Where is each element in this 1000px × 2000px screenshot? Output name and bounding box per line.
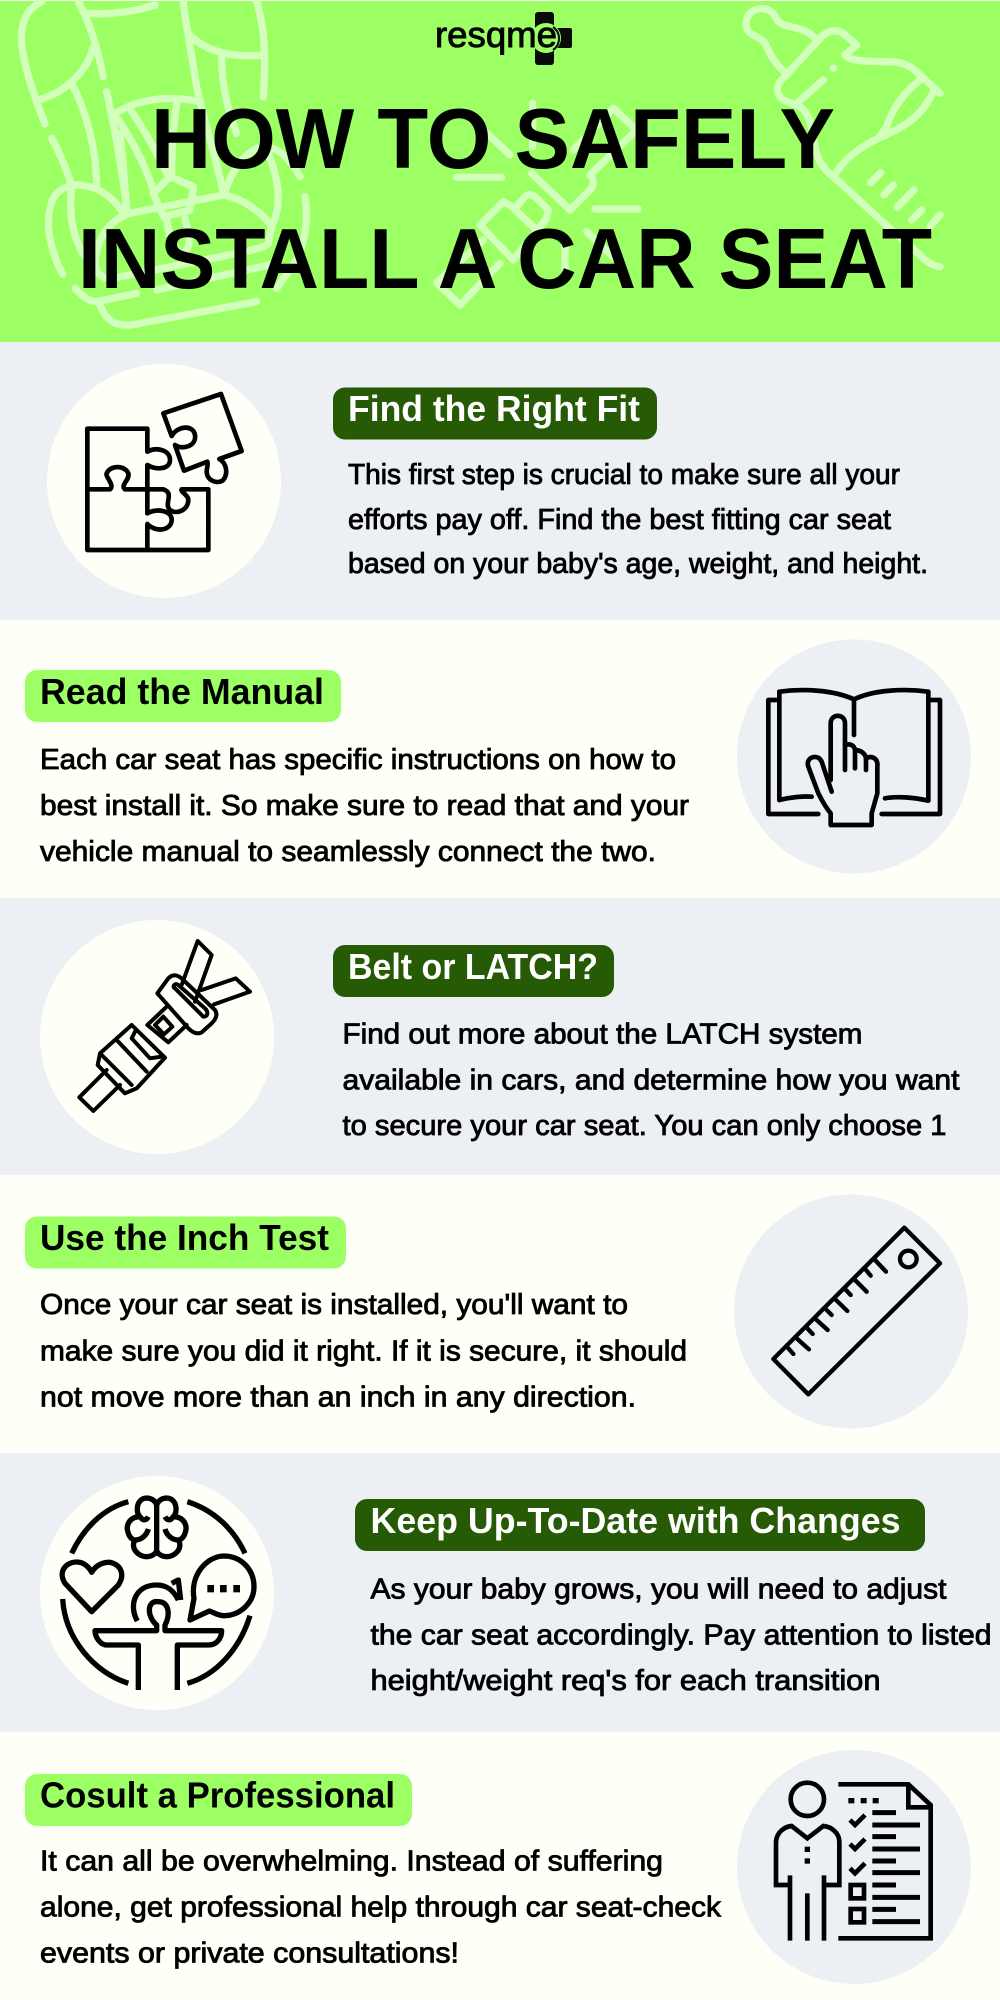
panel: consult a professional (0, 1732, 1000, 2000)
text: keep up-to-date with changes (370, 1574, 992, 1697)
heading: belt or latch: Belt or LATCH? (348, 946, 598, 987)
text: use the inch test: Once your car seat is installed, you'll want to (40, 1289, 628, 1321)
text: consult a professional: events or private consultations! (40, 1938, 459, 1970)
text: use the inch test: not move more than an inch in any direction. (40, 1382, 636, 1414)
header banner (0, 0, 1000, 342)
text: belt or latch (342, 1018, 960, 1142)
icon: person with brain, heart and speech bubble (40, 1476, 274, 1710)
panel: use the inch test (0, 1175, 1000, 1453)
title: INSTALL A CAR SEAT (78, 212, 932, 307)
text: belt or latch: to secure your car seat. You can only choose 1 (342, 1110, 946, 1142)
title: HOW TO SAFELY (151, 92, 835, 187)
panel: read the manual (0, 620, 1000, 898)
icon: professional with checklist (737, 1750, 971, 1984)
background illustration: car seat (21, 2, 307, 325)
panel: keep up-to-date with changes (0, 1453, 1000, 1732)
text: read the manual: vehicle manual to seamlessly connect the two. (40, 836, 656, 868)
heading: use the inch test: Use the Inch Test (40, 1217, 329, 1258)
text: find the right fit: This first step is crucial to make sure all your (348, 459, 900, 491)
text: belt or latch: available in cars, and determine how you want (342, 1064, 960, 1096)
text: use the inch test (40, 1289, 687, 1414)
logo: resqme: resqme (435, 14, 557, 55)
text: read the manual: best install it. So make sure to read that and your (40, 790, 690, 822)
panel: find the right fit (0, 342, 1000, 620)
icon: puzzle pieces (47, 364, 281, 598)
heading: find the right fit: Find the Right Fit (348, 388, 640, 429)
heading: read the manual: Read the Manual (40, 671, 324, 712)
icon: seat belt buckle (40, 920, 274, 1154)
text: find the right fit: based on your baby's age, weight, and height. (348, 548, 928, 580)
text: consult a professional (40, 1846, 722, 1970)
logo: resqme (435, 12, 572, 65)
text: find the right fit (348, 459, 928, 580)
icon: open book with pointing hand (737, 640, 971, 874)
text: consult a professional: alone, get professional help through car seat-check (40, 1892, 722, 1924)
text: keep up-to-date with changes: height/weight req's for each transition (370, 1665, 880, 1697)
heading: keep up-to-date with changes: Keep Up-To-Date with Changes (370, 1500, 900, 1541)
heading: cosult a professional: Cosult a Professional (40, 1774, 395, 1816)
text: read the manual: Each car seat has specific instructions on how to (40, 744, 676, 776)
text: belt or latch: Find out more about the LATCH system (342, 1018, 862, 1050)
panel: belt or latch (0, 898, 1000, 1175)
text: keep up-to-date with changes: the car seat accordingly. Pay attention to listed (370, 1620, 992, 1652)
text: use the inch test: make sure you did it right. If it is secure, it should (40, 1336, 687, 1368)
text: read the manual (40, 744, 690, 868)
icon: ruler (734, 1194, 968, 1428)
text: keep up-to-date with changes: As your baby grows, you will need to adjust (370, 1574, 947, 1606)
text: consult a professional: It can all be overwhelming. Instead of suffering (40, 1846, 663, 1878)
text: find the right fit: efforts pay off. Find the best fitting car seat (348, 504, 891, 536)
title (78, 92, 932, 307)
background illustration: seat belt and bottle (437, 9, 940, 305)
